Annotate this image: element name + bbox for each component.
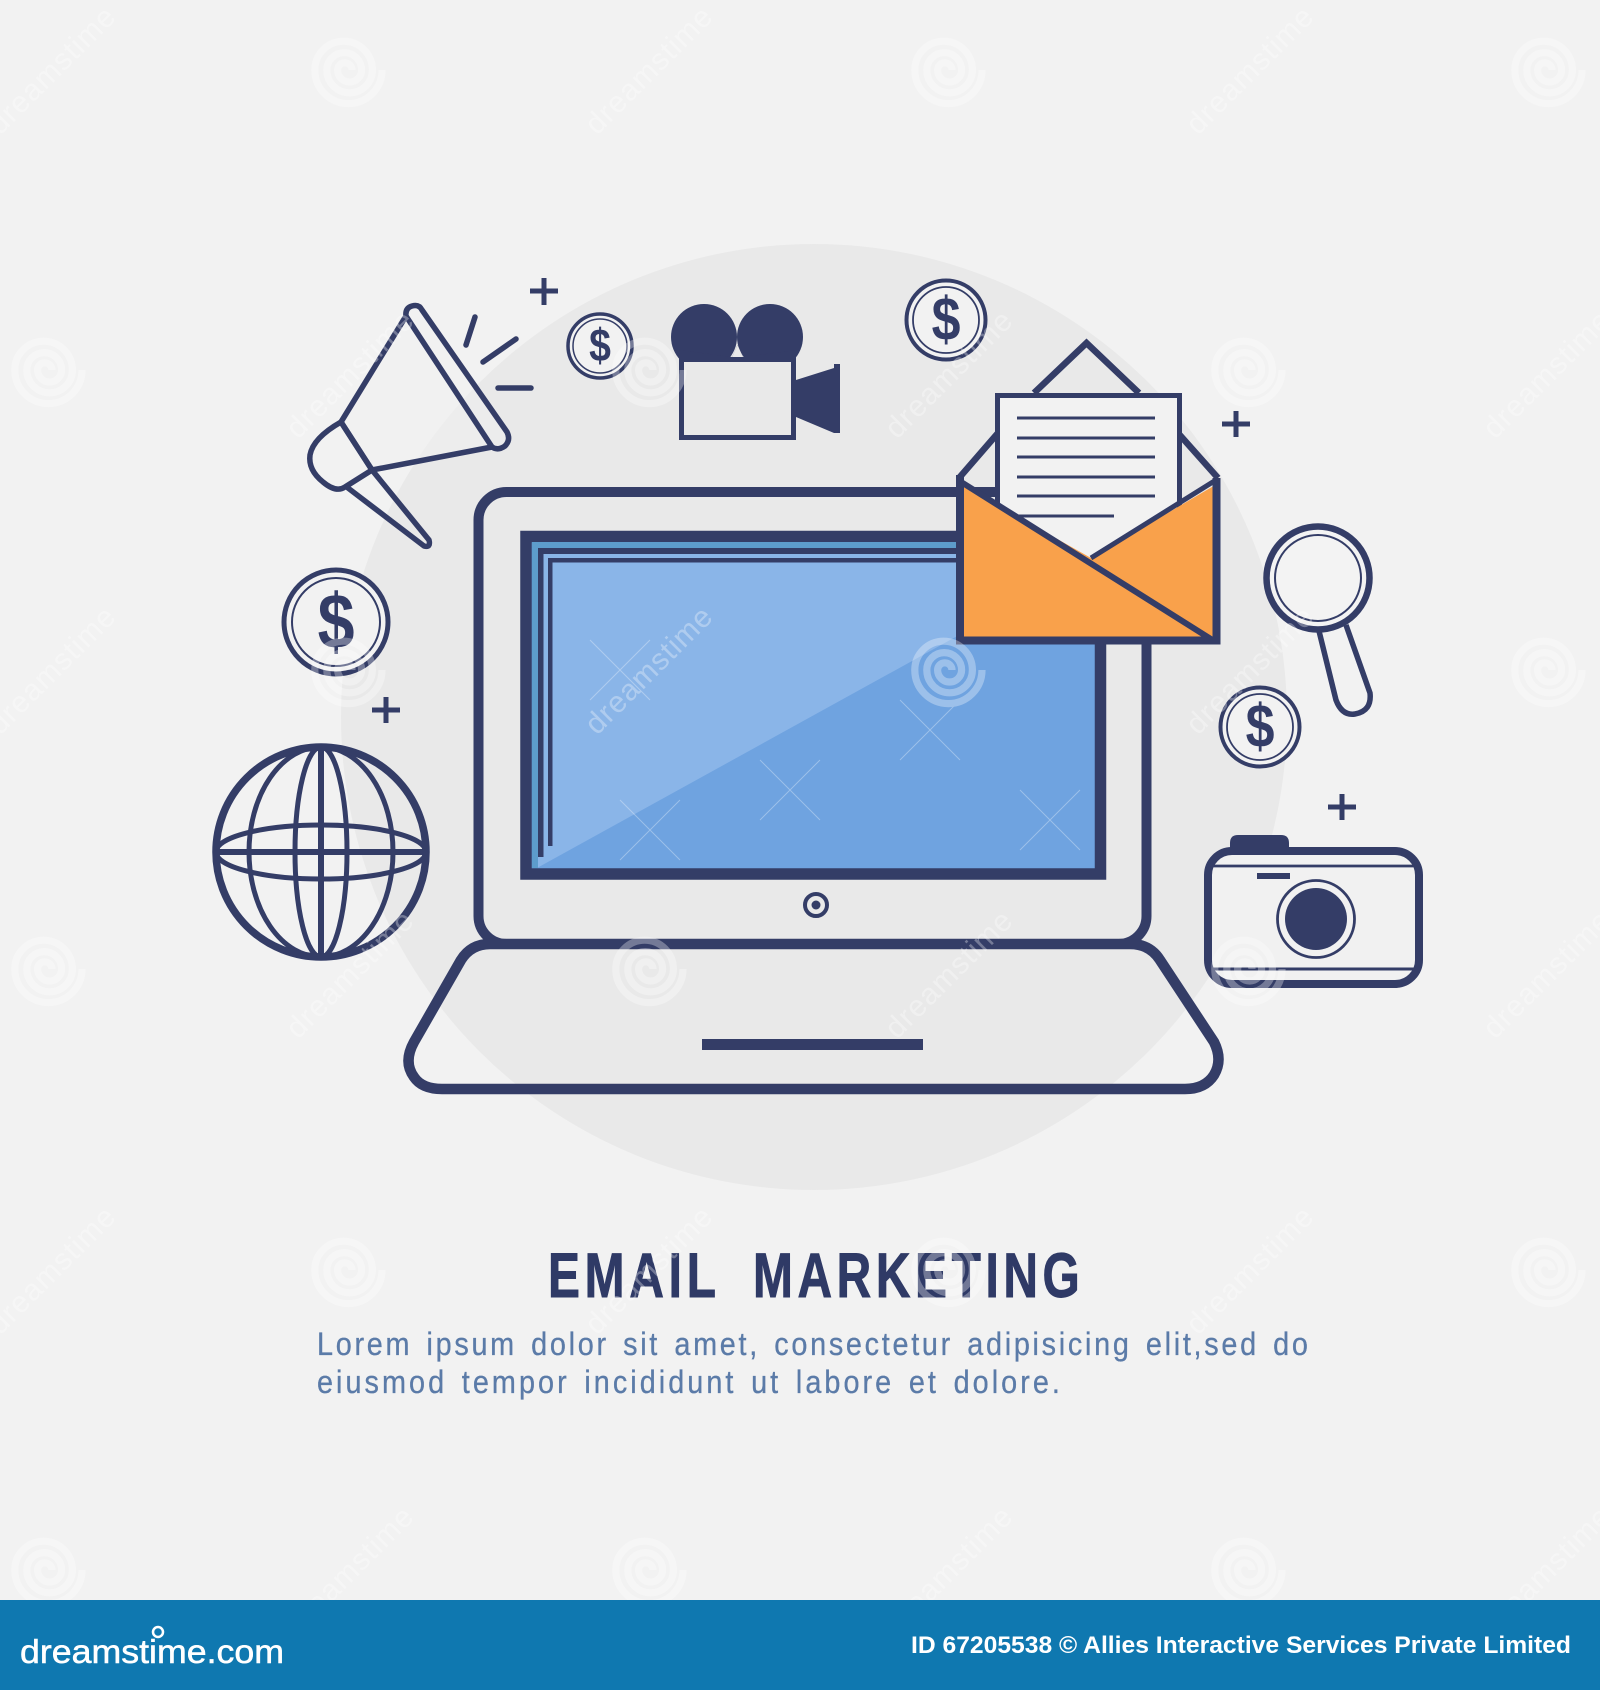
envelope back flap [959, 343, 1218, 478]
icon: globe [216, 747, 426, 957]
webcam [805, 894, 827, 916]
plus sign [530, 278, 558, 305]
coin: large left [284, 570, 388, 674]
trackpad bar [702, 1039, 923, 1050]
watermark overlay: dreamstime [1180, 1200, 1321, 1341]
title [548, 1240, 1080, 1311]
coin: small top: $ [589, 320, 611, 372]
coin: large left: $ [318, 578, 354, 665]
body text [317, 1327, 1308, 1400]
watermark overlay: dreamstime [1180, 0, 1321, 141]
laptop screen [526, 536, 1100, 874]
icon: video camera [671, 304, 840, 438]
icon: megaphone [310, 306, 531, 546]
body text: eiusmod tempor incididunt ut labore et dolore. [317, 1365, 1060, 1400]
laptop lid [478, 492, 1146, 944]
title: EMAIL [548, 1240, 716, 1311]
footer bar [0, 1600, 1600, 1690]
footer credit: ID 67205538 © Allies Interactive Services Private Limited [911, 1632, 1571, 1659]
coin: medium right: $ [1246, 692, 1274, 760]
envelope front [958, 475, 1217, 641]
icon: magnifying glass [1266, 526, 1370, 714]
watermark overlay: dreamstime [879, 304, 1020, 445]
coin: medium top [906, 280, 986, 360]
footer logo: dreamstime.com [20, 1633, 284, 1670]
plus sign [372, 697, 400, 723]
watermark overlay: dreamstime [579, 0, 720, 141]
icon: laptop [408, 492, 1218, 1089]
watermark overlay: dreamstime [280, 304, 421, 445]
icon: open envelope [958, 343, 1218, 641]
coin: medium right [1220, 688, 1300, 766]
letter paper [998, 396, 1180, 586]
plus sign [1328, 794, 1356, 820]
watermark overlay: dreamstime [579, 1200, 720, 1341]
watermark overlay: dreamstime [879, 1500, 1020, 1641]
coin: medium top: $ [932, 285, 960, 353]
watermark overlay: dreamstime [280, 1500, 421, 1641]
body text: Lorem ipsum dolor sit amet, consectetur adipisicing elit,sed do [317, 1327, 1308, 1362]
coin: small top [568, 314, 632, 378]
watermark overlay: dreamstime [1180, 600, 1321, 741]
title: MARKETING [753, 1240, 1080, 1311]
watermark overlay: dreamstime [879, 904, 1020, 1045]
icon: photo camera [1208, 835, 1419, 984]
watermark overlay: dreamstime [280, 904, 421, 1045]
laptop base [408, 944, 1218, 1089]
background circle [341, 244, 1287, 1190]
watermark overlay: dreamstime [579, 600, 720, 741]
plus sign [1222, 411, 1250, 437]
